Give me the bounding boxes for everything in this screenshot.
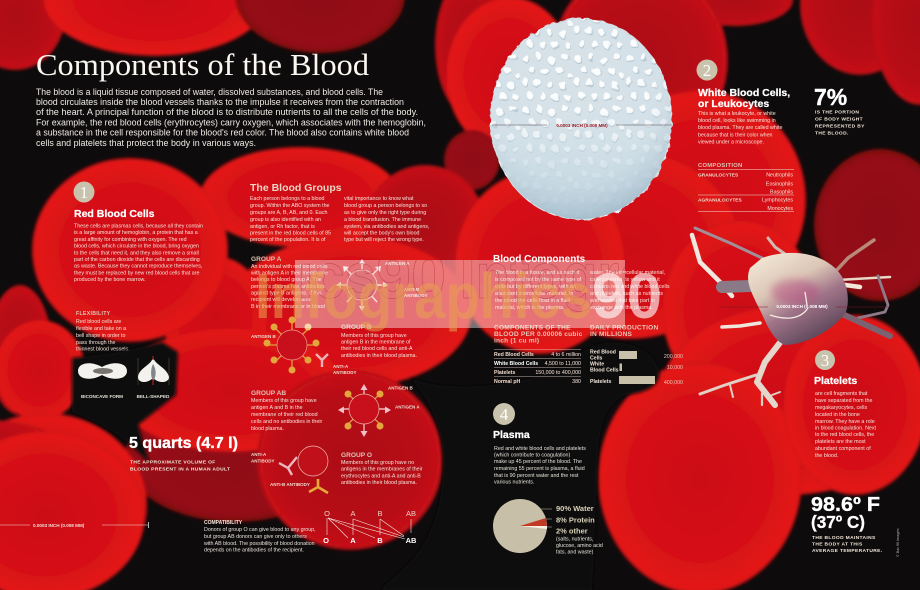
- badge 1: [74, 182, 94, 202]
- body text: plasma: that is 90 percent water and the rest: [494, 473, 579, 479]
- compatibility note: with AB blood. The possibility of blood donation: [204, 541, 315, 547]
- heading: blood components: Blood Components: [493, 254, 586, 265]
- intro text: of the heart. A principal function of the blood is to distribute nutrients to all the cells of the body.: [36, 107, 418, 117]
- table: components of the blood: Red Blood Cells: [494, 352, 534, 358]
- body text column 2: exchange with the plasma.: [590, 305, 653, 311]
- body text: white blood cells: blood cell, looks like swimming in: [698, 118, 776, 124]
- callout: 7%: OF BODY WEIGHT: [815, 116, 863, 122]
- bar chart: daily production: DAILY PRODUCTION: [590, 324, 658, 332]
- panel: white blood cells: [696, 60, 794, 212]
- watermark: Infographics: [255, 260, 592, 332]
- body text column 1: group. Within the ABO system the: [250, 203, 330, 209]
- badge 4: [493, 403, 515, 425]
- group AB text: [251, 390, 322, 432]
- body text: platelets: located in the bone: [815, 412, 860, 418]
- table: components of the blood: 4 to 6 million: [551, 352, 581, 358]
- watermark: Infographics: [460, 240, 797, 312]
- table: composition: Basophils: [770, 190, 793, 196]
- body text: platelets: in blood coagulation. Next: [815, 426, 876, 432]
- icon: biconcave form: BICONCAVE FORM: [81, 394, 123, 399]
- callout: temperature: [811, 493, 883, 554]
- flexibility note: flexible and take on a: [76, 326, 126, 332]
- body text column 1: abundant intercellular material. In: [495, 291, 573, 297]
- body text column 1: the blood the cells float in a fluid: [495, 298, 570, 304]
- body text: platelets: [815, 391, 876, 459]
- intro text: For example, the red blood cells (erythrocytes) carry oxygen, which associates with the hemoglobin,: [36, 117, 426, 127]
- bar chart: daily production: Blood Cells: [590, 368, 619, 374]
- watermark: Infographics: [39, 240, 376, 312]
- intro text: a substance in the cell responsible for the blood's red color. The blood also contains white blood: [36, 128, 409, 138]
- group A text: person's plasma has antibodies: [251, 284, 325, 290]
- group O text: GROUP O: [341, 452, 372, 459]
- panel: blood components: [380, 254, 683, 590]
- group AB text: antigen A and B in the: [251, 405, 303, 411]
- table: components of the blood: White Blood Cells: [494, 361, 538, 367]
- heading: platelets: Platelets: [814, 375, 857, 387]
- body text column 2: [344, 196, 429, 243]
- body text: red blood cells: great affinity for combining with oxygen. The red: [74, 237, 187, 243]
- table: components of the blood: 150,000 to 400,000: [535, 370, 581, 376]
- bar chart: daily production: IN MILLIONS: [590, 331, 633, 338]
- pie legend: 2% other: [556, 526, 588, 536]
- black gap behind shapes: [72, 342, 178, 465]
- pie legend: glucose, amino acid: [556, 543, 603, 549]
- body text: platelets: platelets are the most: [815, 439, 866, 445]
- group B text: [341, 324, 417, 359]
- body text column 1: groups are A, B, AB, and 0. Each: [250, 210, 327, 216]
- watermark: 90: [592, 260, 662, 332]
- callout: 7%: [814, 84, 865, 136]
- badge 3: 3: [821, 351, 829, 370]
- heading: white blood cells: or Leukocytes: [698, 98, 769, 110]
- body text: platelets: megakaryocytes, cells: [815, 405, 867, 411]
- group A text: [251, 256, 328, 310]
- body text: platelets: abundant component of: [815, 446, 871, 452]
- title: Components of the Blood: [36, 47, 370, 82]
- diagram: group AB cell: ANTIGEN A: [395, 404, 420, 410]
- body text: platelets: have separated from the: [815, 398, 872, 404]
- callout: 7%: THE BLOOD.: [815, 130, 849, 136]
- intro text: [36, 87, 426, 148]
- badge 4: 4: [500, 405, 509, 424]
- body text: red blood cells: part of the carbon dioxide that the cells are discarding: [74, 257, 200, 263]
- panel: plasma: [493, 403, 603, 556]
- body text column 1: The blood is a tissue, and as such it: [495, 270, 580, 276]
- callout: temperature: 98.6º F: [811, 493, 880, 516]
- body text: platelets: are cell fragments that: [815, 391, 868, 397]
- flexibility note: [76, 311, 130, 352]
- bar chart: daily production: Platelets: [590, 379, 611, 385]
- table: composition: Eosinophils: [766, 182, 793, 188]
- diagram: group AB cell: [338, 384, 420, 437]
- compatibility note: COMPATIBILITY: [204, 520, 243, 526]
- body text column 1: is composed not by the same type of: [495, 277, 582, 283]
- body text: plasma: (which contribute to coagulation): [494, 452, 570, 458]
- body text: red blood cells: [74, 224, 203, 283]
- body text: white blood cells: because that is their color when: [698, 132, 773, 138]
- table: composition: GRANULOCYTES: [698, 172, 739, 178]
- bar chart: daily production: White: [590, 362, 604, 368]
- diagram: group A cell: [336, 259, 428, 311]
- group B text: antigen B in the membrane of: [341, 340, 411, 346]
- group B text: GROUP B: [341, 324, 372, 331]
- pie legend: [556, 504, 603, 556]
- body text: platelets: to the red blood cells, the: [815, 432, 874, 438]
- table: components of the blood: 380: [572, 379, 581, 385]
- body text: white blood cells: This is what a leukocyte, or white: [698, 111, 776, 117]
- group B text: their red blood cells and anti-A: [341, 346, 413, 352]
- group A text: with antigen A in their membrane: [251, 270, 328, 276]
- bar chart: daily production: 10,000: [667, 365, 683, 371]
- callout: 7%: IS THE PORTION: [815, 110, 859, 116]
- body text: plasma: various nutrients.: [494, 480, 534, 486]
- group A text: B in their membrane or in blood: [251, 304, 325, 310]
- compatibility note: Donors of group O can give blood to any group,: [204, 527, 316, 533]
- table: components of the blood: inch (1 cu ml): [494, 338, 539, 344]
- body text: plasma: Red and white blood cells and platelets: [494, 446, 586, 452]
- callout: temperature: THE BODY AT THIS: [812, 542, 863, 548]
- group A text: belongs to blood group A. The: [251, 277, 322, 283]
- group B text: Members of this group have: [341, 333, 407, 339]
- body text column 1: antigen, or Rh factor, that is: [250, 224, 315, 230]
- flexibility note: Red blood cells are: [76, 319, 121, 325]
- body text column 2: contains red and white blood cells: [590, 284, 670, 290]
- body text: red blood cells: is a large amount of hemoglobin, a protein that has a: [74, 230, 198, 236]
- group A text: An individual with red blood cells: [251, 264, 328, 270]
- group AB text: cells and no antibodies in their: [251, 419, 322, 425]
- callout: 5 quarts: THE APPROXIMATE VOLUME OF: [130, 460, 216, 466]
- body text column 1: Each person belongs to a blood: [250, 196, 325, 202]
- background: dark gap under the components tables: [380, 342, 659, 590]
- group AB text: Members of this group have: [251, 398, 317, 404]
- group A text: recipient will develop anti-: [251, 297, 312, 303]
- heading: white blood cells: White Blood Cells,: [698, 87, 790, 99]
- body text: red blood cells: they must be replaced by new red blood cells that are: [74, 270, 199, 276]
- diagram: group A cell: ANTIGEN A: [385, 261, 410, 266]
- body text column 2: type but will reject the wrong type.: [344, 237, 424, 243]
- table: components of the blood: COMPONENTS OF THE: [494, 324, 571, 332]
- group A text: GROUP A: [251, 256, 282, 263]
- group O text: Members of this group have no: [341, 460, 414, 466]
- heading: white blood cells: [698, 87, 790, 110]
- icon: bell-shaped: [137, 356, 170, 399]
- body text column 2: as to give only the right type during: [344, 210, 426, 216]
- callout: 5 quarts: BLOOD PRESENT IN A HUMAN ADULT: [130, 466, 230, 472]
- body text column 1: cells but by different types, with an: [495, 284, 576, 290]
- diagram: compatibility arrows: [323, 509, 417, 545]
- body text: white blood cells: [698, 111, 782, 146]
- body text: platelets: the blood.: [815, 453, 838, 459]
- diagram: compatibility arrows: AB: [406, 536, 417, 545]
- bar chart: daily production: Red Blood: [590, 350, 616, 356]
- pie chart: plasma composition: [493, 499, 552, 553]
- table: components of the blood: BLOOD PER 0.00006 cubic: [494, 331, 583, 338]
- heading: plasma: Plasma: [493, 429, 530, 441]
- group O text: [341, 452, 423, 486]
- diagram: compatibility arrows: O: [323, 536, 329, 545]
- body text column 1: present in the red blood cells of 85: [250, 230, 331, 236]
- diagram: compatibility arrows: AB: [406, 509, 416, 518]
- table: composition: Lymphocytes: [762, 198, 793, 204]
- compatibility note: [204, 520, 316, 554]
- callout: 5 quarts: [129, 435, 238, 472]
- body text column 2: water. The intercellular material,: [590, 270, 665, 276]
- body text: red blood cells: to the cells that need it, and they also remove a small: [74, 250, 199, 256]
- callout: temperature: (37º C): [811, 512, 865, 532]
- body text: white blood cells: blood plasma. They are called white: [698, 125, 782, 131]
- table: components of the blood: [494, 324, 583, 385]
- body text column 2: system, via antibodies and antigens,: [344, 224, 429, 230]
- table: composition: AGRANULOCYTES: [698, 198, 743, 204]
- body text column 2: called plasma, is yellow and it: [590, 277, 660, 283]
- watermark: 90: [376, 240, 446, 312]
- icon: biconcave form: [78, 363, 127, 399]
- body text: plasma: [494, 446, 586, 486]
- scale: white cell: 0.0003 INCH (0.008 MM): [556, 123, 608, 128]
- table: composition: Monocytes: [767, 206, 793, 212]
- bar chart: daily production: 200,000: [664, 354, 683, 360]
- pie legend: 8% Protein: [556, 516, 595, 524]
- body text column 2: [590, 270, 670, 311]
- heading: red blood cells: Red Blood Cells: [74, 208, 155, 220]
- panel: platelets: [814, 350, 876, 459]
- body text: plasma: remaining 55 percent is plasma, a fluid: [494, 466, 585, 472]
- group O text: antibodies in their blood plasma.: [341, 480, 417, 486]
- panel: the blood groups: [204, 182, 429, 554]
- diagram: compatibility arrows: B: [377, 509, 383, 518]
- body text: red blood cells: as waste. Because they cannot reproduce themselves,: [74, 264, 202, 270]
- body text: red blood cells: These cells are plasmas cells, because all they contain: [74, 224, 203, 230]
- intro text: blood circulates inside the blood vessels thanks to the impulse it receives from the contraction: [36, 97, 404, 107]
- credit: © Bar 90 Images: [896, 528, 900, 557]
- flexibility note: thinnest blood vessels.: [76, 346, 130, 352]
- body text: platelets: marrow. They have a role: [815, 419, 875, 425]
- diagram: group O cell: ANTIBODY: [251, 458, 274, 464]
- group B text: antibodies in their blood plasma.: [341, 353, 417, 359]
- badge 2: 2: [703, 61, 711, 80]
- body text column 2: will accept the body's own blood: [344, 230, 420, 236]
- icon: bell-shaped: BELL-SHAPED: [137, 394, 170, 399]
- body text column 1: percent of the population. It is of: [250, 237, 326, 243]
- diagram: compatibility arrows: A: [350, 509, 356, 518]
- platelet cell: [692, 228, 890, 405]
- pie legend: 90% Water: [556, 504, 594, 513]
- table: composition: COMPOSITION: [698, 163, 743, 169]
- table: components of the blood: Normal pH: [494, 379, 520, 385]
- badge 2: [696, 60, 718, 80]
- callout: temperature: AVERAGE TEMPERATURE.: [812, 548, 883, 554]
- body text: red blood cells: produced by the bone marrow.: [74, 277, 146, 283]
- body text: plasma: make up 45 percent of the blood. The: [494, 459, 582, 465]
- body text: white blood cells: viewed under a microscope.: [698, 140, 764, 146]
- body text column 2: a blood transfusion. The immune: [344, 217, 421, 223]
- intro text: The blood is a liquid tissue composed of water, dissolved substances, and blood cells. The: [36, 87, 383, 97]
- badge 1: 1: [80, 183, 88, 202]
- callout: 7%: 7%: [814, 84, 847, 110]
- diagram: group B cell: [251, 316, 356, 375]
- callout: 7%: REPRESENTED BY: [815, 124, 865, 130]
- diagram: group B cell: ANTI-A: [333, 364, 349, 369]
- body text column 2: and wastes that take part in: [590, 298, 655, 304]
- table: components of the blood: 4,500 to 11,000: [545, 361, 581, 367]
- diagram: group B cell: ANTIGEN B: [251, 334, 277, 339]
- bar chart: daily production: Cells: [590, 356, 603, 362]
- bar chart: daily production: [590, 324, 683, 386]
- diagram: group A cell: ANTIBODY: [404, 293, 428, 298]
- pie legend: fats, and waste): [556, 550, 594, 556]
- body text column 1: [250, 196, 331, 243]
- diagram: compatibility arrows: B: [377, 536, 383, 545]
- body text column 2: and platelets, such as nutrients: [590, 291, 663, 297]
- panel: red blood cells: [72, 182, 203, 465]
- flexibility note: bell shape in order to: [76, 333, 126, 339]
- diagram: group A cell: ANTI-B: [404, 287, 420, 292]
- white blood cell: [490, 18, 672, 220]
- body text: red blood cells: blood cells, which circulate in the blood, bring oxygen: [74, 244, 199, 250]
- body text column 1: group is also identified with an: [250, 217, 321, 223]
- table: composition: Neutrophils: [766, 172, 793, 178]
- compatibility note: but group AB donors can give only to others: [204, 534, 307, 540]
- flexibility note: pass through the: [76, 340, 116, 346]
- group O text: erythrocytes and anti-A and anti-B: [341, 474, 421, 480]
- body text column 1: material, which is the plasma.: [495, 305, 564, 311]
- table: composition: [698, 163, 794, 212]
- compatibility note: depends on the antibodies of the recipient.: [204, 548, 304, 554]
- bar chart: daily production: 400,000: [664, 380, 683, 386]
- group AB text: GROUP AB: [251, 390, 286, 397]
- pie legend: (salts, nutrients,: [556, 536, 593, 542]
- group AB text: membrane of their red blood: [251, 412, 318, 418]
- table: components of the blood: Platelets: [494, 370, 515, 376]
- intro text: cells and platelets that protect the body in various ways.: [36, 138, 256, 148]
- diagram: group O cell: [251, 446, 328, 493]
- diagram: group B cell: ANTIBODY: [333, 370, 356, 375]
- diagram: compatibility arrows: A: [350, 536, 356, 545]
- diagram: group O cell: ANTI-B ANTIBODY: [270, 482, 310, 487]
- scale: platelet: 0.0003 INCH (0.008 MM): [776, 304, 828, 309]
- callout: temperature: THE BLOOD MAINTAINS: [812, 535, 876, 541]
- flexibility note: FLEXIBILITY: [76, 311, 111, 317]
- heading: blood groups: The Blood Groups: [250, 182, 342, 194]
- diagram: group AB cell: ANTIGEN B: [388, 386, 414, 390]
- diagram: group O cell: ANTI-A: [251, 452, 267, 457]
- body text column 2: blood group a person belongs to so: [344, 203, 427, 209]
- group O text: antigens in the membranes of their: [341, 466, 423, 472]
- diagram: compatibility arrows: O: [324, 509, 330, 518]
- group A text: against type B antigens. If this: [251, 290, 322, 296]
- body text column 1: [495, 270, 582, 311]
- callout: 5 quarts: 5 quarts (4.7 l): [129, 435, 238, 452]
- body text column 2: vital importance to know what: [344, 196, 414, 202]
- group AB text: blood plasma.: [251, 426, 284, 432]
- scale: red cell: 0.0003 INCH (0.008 MM): [33, 523, 85, 528]
